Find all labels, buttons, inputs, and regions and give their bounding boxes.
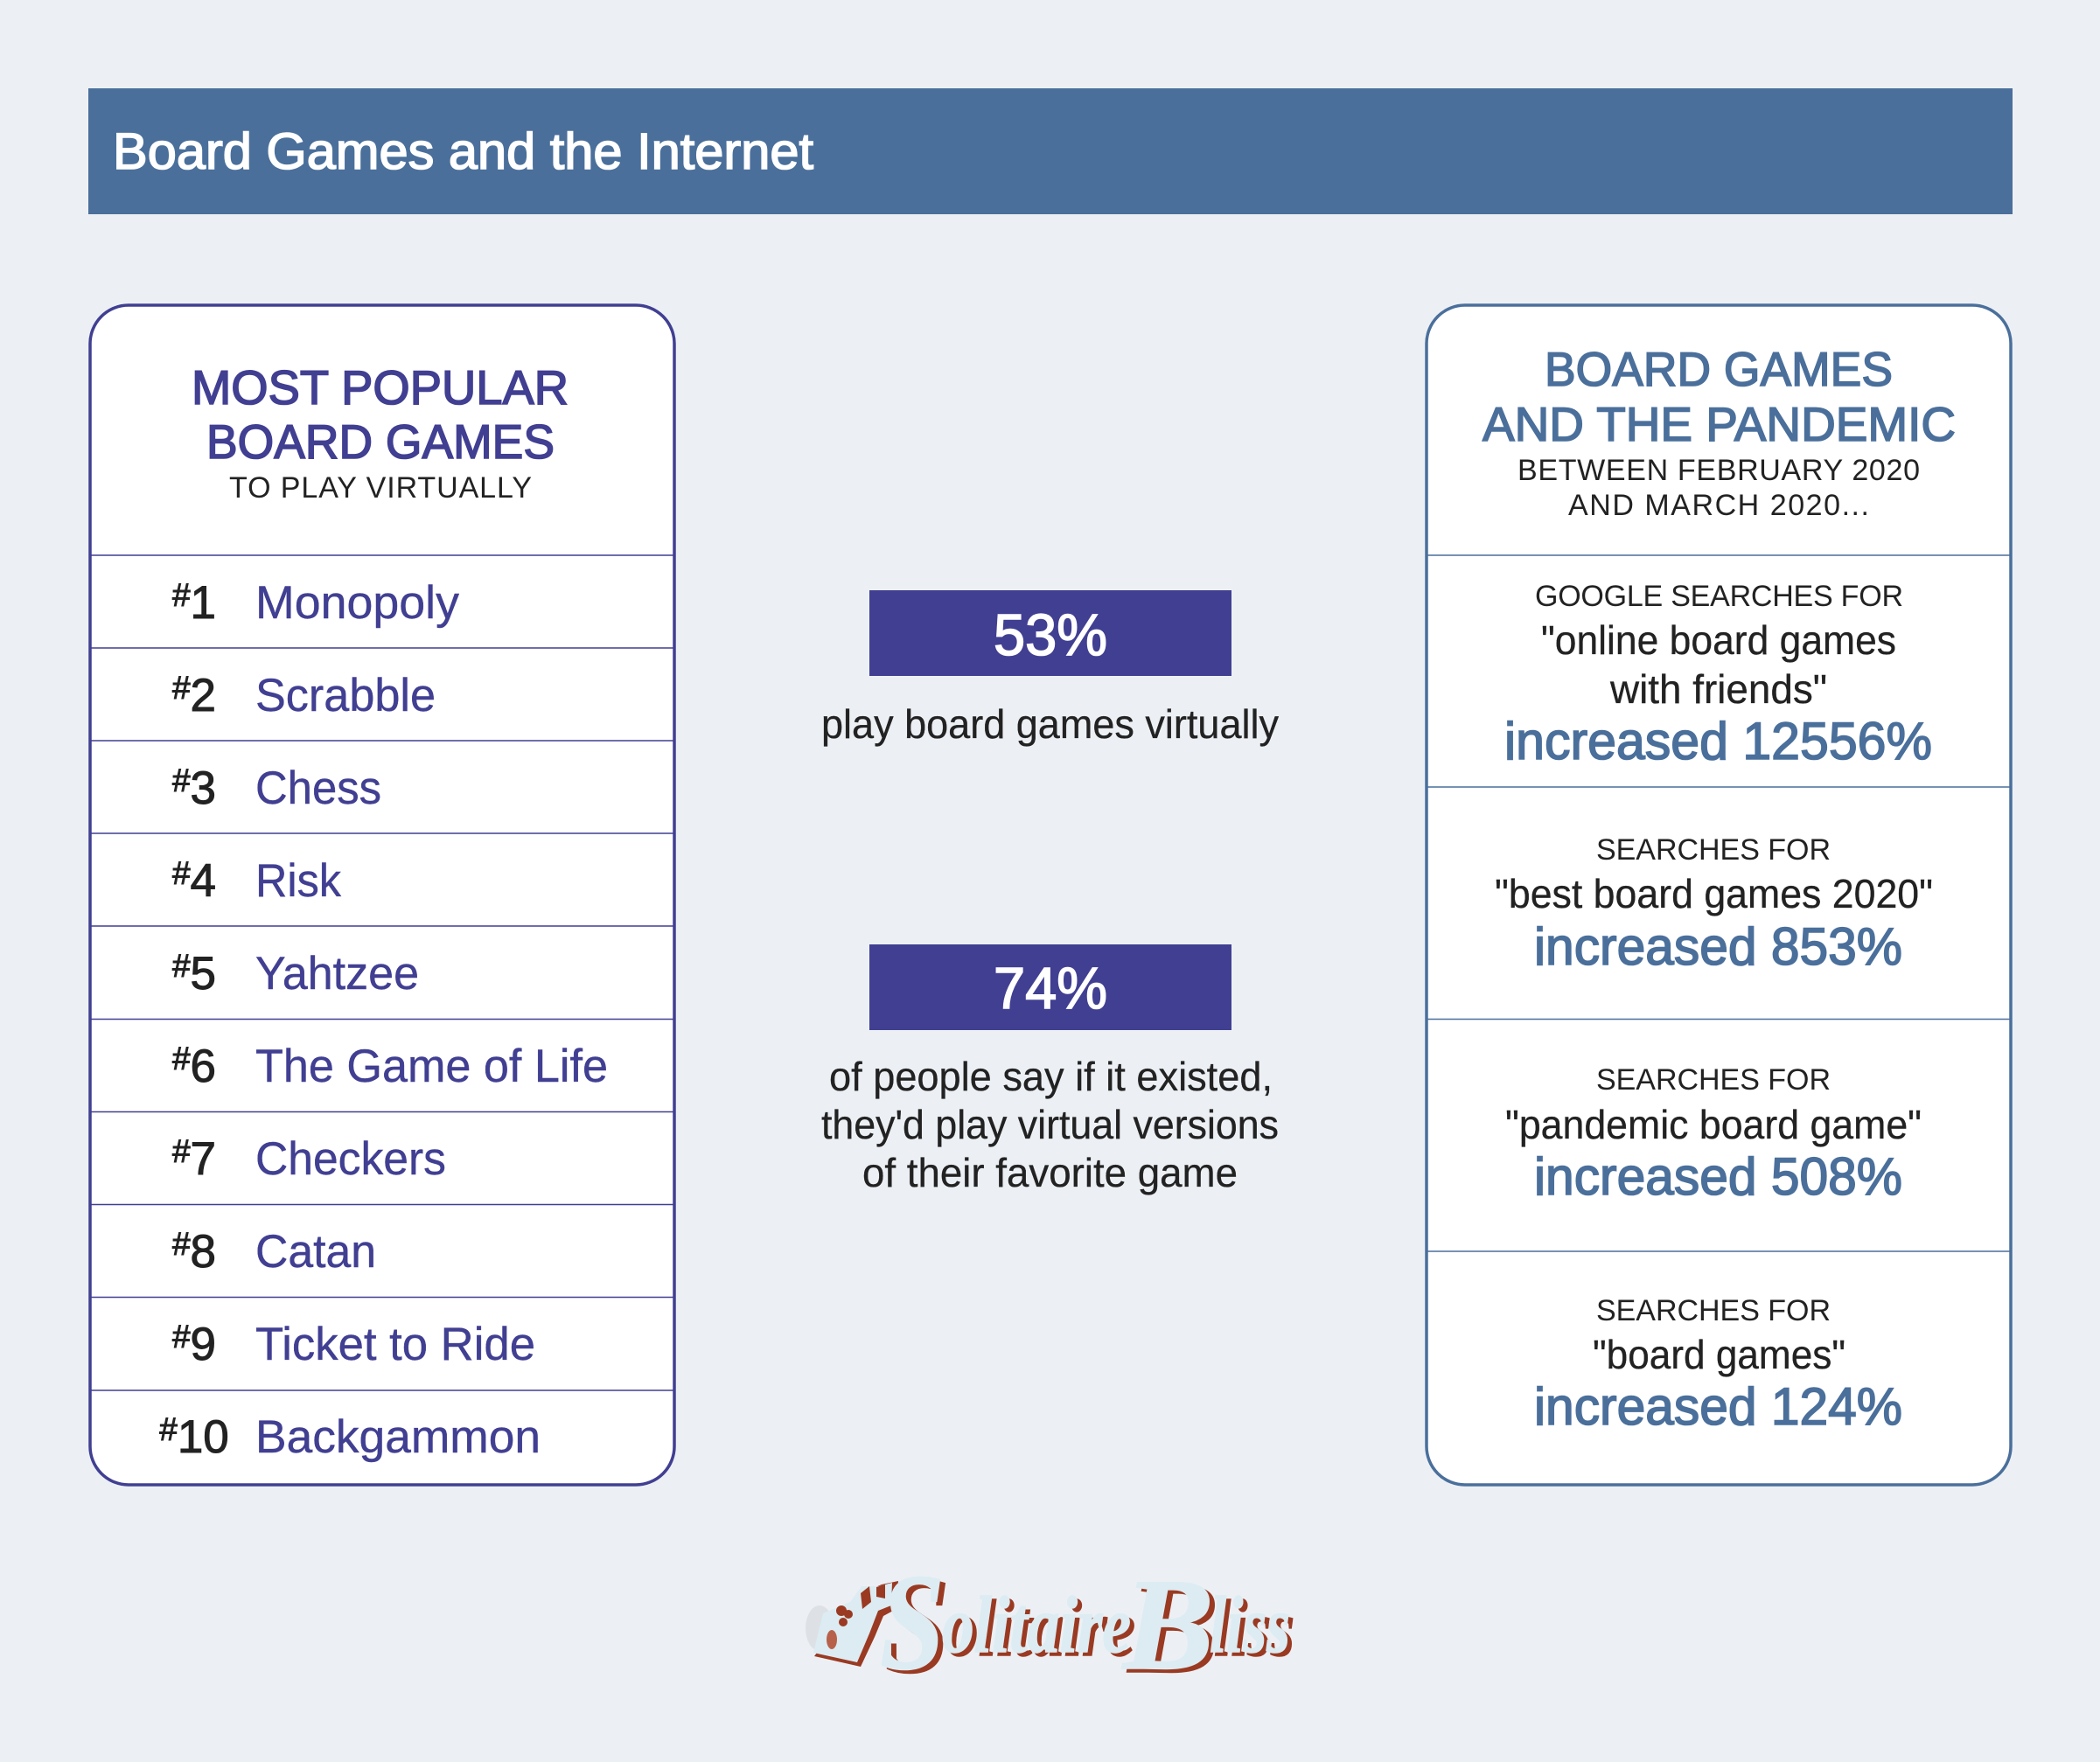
rank row 3: Chess (255, 763, 381, 814)
rank row 10: # (159, 1411, 178, 1447)
heading: board games and the pandemic: AND THE PANDEMIC (1483, 397, 1956, 451)
heading: board games and the pandemic: BOARD GAMES (1545, 342, 1893, 396)
rank row 5: 5 (191, 948, 216, 999)
wordmark: B (1121, 1552, 1214, 1697)
rank row 1: Monopoly (255, 577, 459, 629)
rank row 6: 6 (191, 1041, 216, 1092)
stat: pandemic board game: increased 508% (1534, 1147, 1902, 1206)
panel: most popular board games (90, 305, 674, 1485)
rank row 5: # (172, 948, 191, 984)
panel: board games and the pandemic (1427, 305, 2011, 1485)
rank row 3: # (172, 763, 191, 798)
stat: online board games with friends: with friends" (1609, 666, 1827, 712)
wordmark: olitaire (946, 1584, 1135, 1673)
stat: best board games 2020: increased 853% (1534, 917, 1902, 976)
wordmark: liss (1214, 1584, 1294, 1673)
rank row 4: 4 (191, 855, 216, 907)
rank row 9: # (172, 1319, 191, 1355)
rank row 8: Catan (255, 1226, 376, 1278)
rank row 7: # (172, 1133, 191, 1169)
stat: board games (1534, 1294, 1902, 1436)
stat: online board games with friends: GOOGLE SEARCHES FOR (1535, 580, 1903, 613)
stat: online board games with friends: increased 12556% (1504, 712, 1932, 770)
stat: best board games 2020 (1495, 833, 1933, 976)
rank row 7: 7 (191, 1133, 216, 1185)
stat: board games: "board games" (1593, 1332, 1845, 1377)
stat: board games: increased 124% (1534, 1377, 1902, 1436)
stat: 53% play virtually: 53% (994, 602, 1107, 668)
rank row 8: 8 (191, 1226, 216, 1278)
rank row 8 (172, 1226, 376, 1278)
rank row 2: # (172, 670, 191, 706)
rank row 9: Ticket to Ride (255, 1319, 535, 1370)
stat: online board games with friends: "online board games (1541, 617, 1896, 663)
rank row 5 (172, 948, 419, 999)
heading: most popular board games: TO PLAY VIRTUALLY (229, 471, 532, 505)
stat: pandemic board game: "pandemic board game" (1505, 1102, 1922, 1147)
rank row 6: # (172, 1041, 191, 1076)
stat: 53% play virtually: play board games virtually (821, 701, 1279, 747)
wordmark: B (1127, 1556, 1219, 1701)
rank row 7: Checkers (255, 1133, 446, 1185)
heading: board games and the pandemic: BETWEEN FEBRUARY 2020 (1517, 454, 1920, 487)
stat: 74% would play (821, 944, 1279, 1195)
logo: Solitaire Bliss (806, 1546, 1294, 1703)
stat: 74% would play: of people say if it existed, (829, 1054, 1273, 1099)
stat: pandemic board game: SEARCHES FOR (1596, 1063, 1831, 1097)
rank row 2: Scrabble (255, 670, 436, 721)
rank row 7 (172, 1133, 446, 1185)
rank row 3: 3 (191, 763, 216, 814)
heading: most popular board games: BOARD GAMES (206, 414, 555, 469)
rank row 2 (172, 670, 436, 721)
stat: 74% would play: they'd play virtual versions (821, 1102, 1279, 1147)
stat: pandemic board game (1505, 1063, 1922, 1206)
wordmark (880, 1546, 1294, 1703)
stat: 74% would play: of their favorite game (862, 1150, 1238, 1195)
rank row 4 (172, 855, 341, 907)
icon: playing cards (806, 1581, 898, 1667)
rank row 6: The Game of Life (255, 1041, 608, 1092)
heading: board games and the pandemic (1483, 342, 1956, 522)
rank row 1 (172, 577, 459, 629)
wordmark: S (880, 1546, 945, 1699)
rank row 10: 10 (178, 1411, 229, 1463)
stat: best board games 2020: "best board games 2020" (1495, 871, 1933, 916)
title: Board Games and the Internet (113, 123, 813, 180)
stat: 53% play virtually (821, 590, 1279, 747)
wordmark: S (885, 1550, 950, 1703)
header bar (88, 88, 2013, 214)
rank row 3 (172, 763, 381, 814)
stat: best board games 2020: SEARCHES FOR (1596, 833, 1831, 867)
heading: most popular board games (192, 360, 569, 505)
rank row 4: Risk (255, 855, 341, 907)
heading: board games and the pandemic: AND MARCH 2020... (1568, 489, 1869, 522)
rank row 8: # (172, 1226, 191, 1262)
stat: online board games with friends (1504, 580, 1932, 770)
rank row 9: 9 (191, 1319, 216, 1370)
rank row 10: Backgammon (255, 1411, 541, 1463)
wordmark: liss (1210, 1580, 1290, 1669)
wordmark: olitaire (942, 1580, 1131, 1669)
rank row 1: # (172, 577, 191, 613)
rank row 5: Yahtzee (255, 948, 419, 999)
stat: 74% would play: 74% (994, 956, 1107, 1021)
rank row 1: 1 (191, 577, 216, 629)
rank row 2: 2 (191, 670, 216, 721)
heading: most popular board games: MOST POPULAR (192, 360, 569, 414)
rank row 4: # (172, 855, 191, 891)
stat: board games: SEARCHES FOR (1596, 1294, 1831, 1327)
